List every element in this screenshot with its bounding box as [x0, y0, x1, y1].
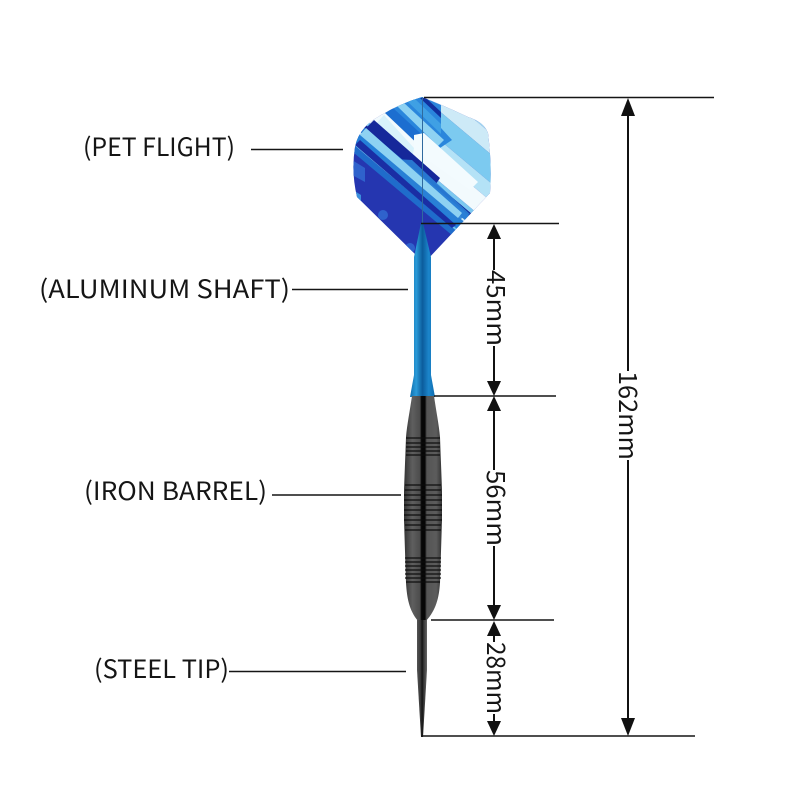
- dart dimension diagram: [42, 96, 714, 737]
- label: steel tip: (STEEL TIP): [94, 650, 229, 686]
- icon: pet flight: [353, 97, 491, 256]
- label: aluminum shaft: (ALUMINUM SHAFT): [39, 270, 290, 306]
- dimension: 56mm: [479, 396, 515, 620]
- shaft: [410, 223, 435, 397]
- leader lines and extension lines: [229, 98, 714, 736]
- dimension: 162mm: [611, 98, 647, 736]
- barrel: [404, 396, 442, 621]
- dimension: 28mm: 28mm: [479, 642, 515, 714]
- dimension: 56mm: 56mm: [479, 470, 515, 546]
- dimension: 45mm: [479, 224, 515, 396]
- label: iron barrel: (IRON BARREL): [84, 472, 267, 508]
- steel tip: [417, 620, 427, 737]
- upper-left stripes: [385, 97, 452, 148]
- dimension: 45mm: 45mm: [479, 270, 515, 346]
- dimension: 28mm: [479, 621, 515, 736]
- label: pet flight: (PET FLIGHT): [83, 128, 235, 164]
- dimension: 162mm: 162mm: [611, 371, 647, 460]
